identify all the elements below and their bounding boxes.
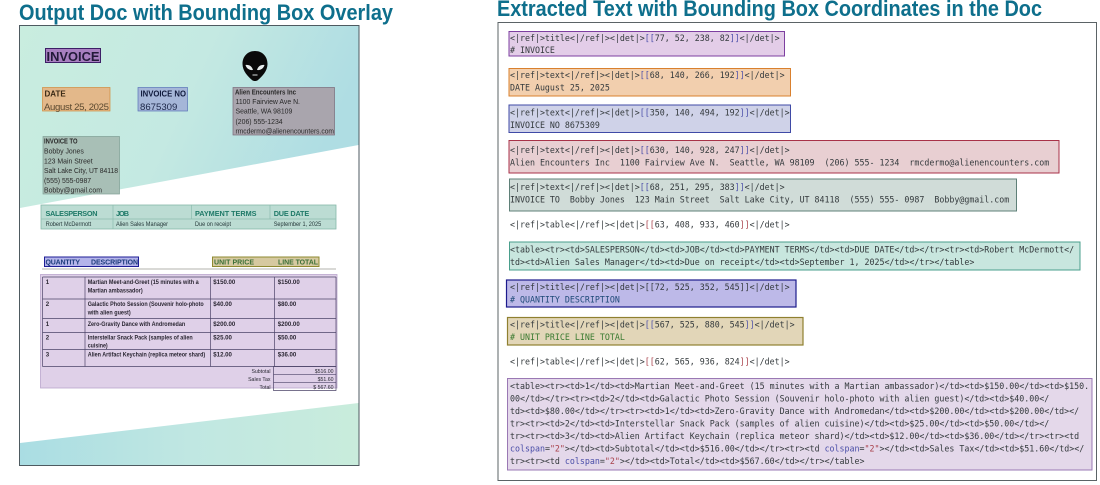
extract block: job table html: td><td>Alien Sales Manager</td><td>Due on receipt</td><td>September 1, 2025</td></tr></table> [510, 258, 974, 268]
date box: DATE [44, 90, 66, 98]
bill-to box: INVOICE TO [44, 138, 78, 146]
line items table: $516.00 [315, 369, 334, 375]
line items table: $40.00 [213, 301, 233, 308]
line items table: Total [260, 385, 270, 391]
extract block: quantity heading: <|ref|>title<|/ref|><|det|>[[72, 525, 352, 545]]<|/det|> [510, 283, 790, 293]
line items table: $50.00 [278, 334, 297, 342]
bill-to box [43, 136, 120, 195]
extract block: items table html [508, 378, 1092, 470]
line items table: Interstellar Snack Pack (samples of alien [88, 334, 193, 342]
extract block: quantity heading [506, 280, 796, 307]
extract label: job table: <|ref|>table<|/ref|><|det|>[[63, 408, 933, 460]]<|/det|> [510, 220, 790, 231]
sender address box: rmcdermo@alienencounters.com [236, 129, 334, 136]
sender address box: Seattle, WA 98109 [236, 109, 292, 116]
line items table: Zero-Gravity Dance with Andromedan [88, 321, 185, 328]
line items table: $ 567.60 [313, 385, 334, 391]
extract block: date [509, 68, 790, 96]
extract block: sender address: Alien Encounters Inc 1100 Fairview Ave N. Seattle, WA 98109 (206) 555- 1234 rmcdermo@alienencounters.com [510, 158, 1049, 169]
quantity and description heading box: QUANTITY [46, 260, 80, 266]
job details table: Robert McDermott [46, 222, 92, 228]
line items table: 3 [46, 351, 50, 358]
line items table: $51.60 [318, 377, 334, 383]
line items table: 2 [46, 334, 50, 342]
extract block: unit price heading: <|ref|>title<|/ref|><|det|>[[567, 525, 880, 545]]<|/det|> [510, 320, 795, 331]
line items table: $12.00 [213, 351, 233, 358]
extract block: unit price heading: # UNIT PRICE LINE TOTAL [510, 333, 625, 343]
extract block: invoice title: <|ref|>title<|/ref|><|det|>[[77, 52, 238, 82]]<|/det|> [510, 33, 780, 44]
job details table: September 1, 2025 [274, 222, 322, 228]
bill-to box: Salt Lake City, UT 84118 [44, 168, 118, 175]
job details table: JOB [116, 209, 129, 218]
line items table: Martian Meet-and-Greet (15 minutes with a [88, 279, 199, 286]
icon: alien head [242, 51, 268, 81]
job details table: PAYMENT TERMS [195, 209, 257, 218]
sender address box: 1100 Fairview Ave N. [236, 99, 300, 106]
extract block: job table html [510, 242, 1080, 270]
line items table: with alien guest) [87, 309, 131, 316]
job details table: SALESPERSON [46, 209, 98, 218]
invoice number box: INVOICE NO [140, 90, 186, 98]
extract block: invoice title [509, 32, 784, 56]
extract block: date: <|ref|>text<|/ref|><|det|>[[68, 140, 266, 192]]<|/det|> [510, 71, 785, 81]
line items table: Alien Artifact Keychain (replica meteor shard) [88, 351, 205, 358]
line items table: $25.00 [213, 334, 233, 342]
extract block: invoice number: INVOICE NO 8675309 [510, 121, 600, 131]
extract block: bill-to [510, 179, 1016, 211]
extract block: items table html: tr><tr><td>2</td><td>Interstellar Snack Pack (samples of alien cuisine)</td><td>$25.00</td><td>$50.00</td></ [510, 419, 1049, 430]
extract block: items table html: tr><tr><td colspan="2"></td><td>Total</td><td>$567.60</td></tr></table> [510, 457, 865, 467]
extract block: items table html: tr><tr><td>3</td><td>Alien Artifact Keychain (replica meteor shard)</td><td>$12.00</td><td>$36.00</td></tr><tr><td [510, 432, 1079, 442]
extract block: sender address [509, 140, 1059, 173]
line items table: $80.00 [278, 301, 297, 308]
date box: August 25, 2025 [44, 102, 109, 113]
job details table: Due on receipt [195, 222, 231, 228]
bill-to box: 123 Main Street [44, 158, 93, 165]
sender address box: Alien Encounters Inc [235, 89, 296, 96]
line items table: Galactic Photo Session (Souvenir holo-photo [88, 301, 204, 308]
line items table: Martian ambassador) [88, 288, 143, 294]
job details table: Alien Sales Manager [116, 222, 168, 228]
unit price and line total heading box: UNIT PRICE [214, 260, 254, 266]
quantity and description heading box [44, 257, 138, 266]
extract block: items table html: 00</td></tr><tr><td>2</td><td>Galactic Photo Session (Souvenir holo-photo with alien guest)</td><td>$40.00</ [510, 394, 1049, 405]
job details table [41, 205, 336, 229]
date box [42, 88, 110, 113]
extract label: items table: <|ref|>table<|/ref|><|det|>[[62, 565, 936, 824]]<|/det|> [510, 357, 790, 368]
extract block: invoice title: # INVOICE [510, 46, 555, 56]
invoice number box [138, 88, 188, 113]
line items table: 1 [46, 279, 50, 286]
extract block: items table html: colspan="2"></td><td>Subtotal</td><td>$516.00</td></tr><tr><td colspan="2"></td><td>Sales Tax</td><td>$51.60</td></ [510, 444, 1084, 455]
extract block: sender address: <|ref|>text<|/ref|><|det|>[[630, 140, 928, 247]]<|/det|> [510, 146, 790, 156]
extract block: bill-to: <|ref|>text<|/ref|><|det|>[[68, 251, 295, 383]]<|/det|> [510, 183, 785, 193]
panel: invoice document with overlays [20, 26, 359, 466]
panel: extracted text [498, 22, 1096, 480]
line items table: $150.00 [278, 279, 300, 286]
extract block: unit price heading [508, 318, 803, 345]
quantity and description heading box: DESCRIPTION [91, 260, 138, 266]
sender address box [233, 88, 334, 136]
job details table: DUE DATE [274, 209, 309, 218]
line items table: 1 [46, 321, 50, 328]
extract block: quantity heading: # QUANTITY DESCRIPTION [510, 295, 620, 306]
extract block: job table html: <table><tr><td>SALESPERSON</td><td>JOB</td><td>PAYMENT TERMS</td><td>DUE DATE</td></tr><tr><td>Robert McDermott</ [510, 245, 1074, 256]
line items table: cuisine) [88, 342, 108, 350]
extract block: items table html: <table><tr><td>1</td><td>Martian Meet-and-Greet (15 minutes with a Martian ambassador)</td><td>$150.00</td><td>$150. [510, 382, 1089, 392]
line items table: $200.00 [278, 321, 300, 328]
extract block: date: DATE August 25, 2025 [510, 83, 610, 94]
line items table: Subtotal [251, 369, 270, 375]
extract block: invoice number: <|ref|>text<|/ref|><|det|>[[350, 140, 494, 192]]<|/det|> [510, 108, 790, 119]
extract block: items table html: td><td>$80.00</td></tr><tr><td>1</td><td>Zero-Gravity Dance with Andromedan</td><td>$200.00</td><td>$200.00</td></ [510, 407, 1079, 417]
line items table: $36.00 [278, 351, 297, 358]
line items table [40, 274, 337, 391]
invoice number box: 8675309 [140, 102, 177, 113]
bill-to box: Bobby@gmail.com [44, 188, 102, 195]
bill-to box: Bobby Jones [44, 148, 84, 155]
line items table: Sales Tax [248, 377, 271, 383]
extract block: bill-to: INVOICE TO Bobby Jones 123 Main Street Salt Lake City, UT 84118 (555) 555- 0987 Bobby@gmail.com [510, 195, 1009, 206]
extract block: invoice number [509, 105, 790, 132]
bill-to box: (555) 555-0987 [44, 178, 91, 185]
unit price and line total heading box: LINE TOTAL [278, 260, 319, 266]
line items table: $150.00 [213, 279, 236, 286]
invoice title box: INVOICE [46, 50, 100, 64]
sender address box: (206) 555-1234 [236, 119, 283, 126]
heading: output doc: Output Doc with Bounding Box Overlay [19, 0, 394, 25]
unit price and line total heading box [212, 257, 319, 266]
line items table: $200.00 [213, 321, 236, 328]
line items table: 2 [46, 301, 50, 308]
